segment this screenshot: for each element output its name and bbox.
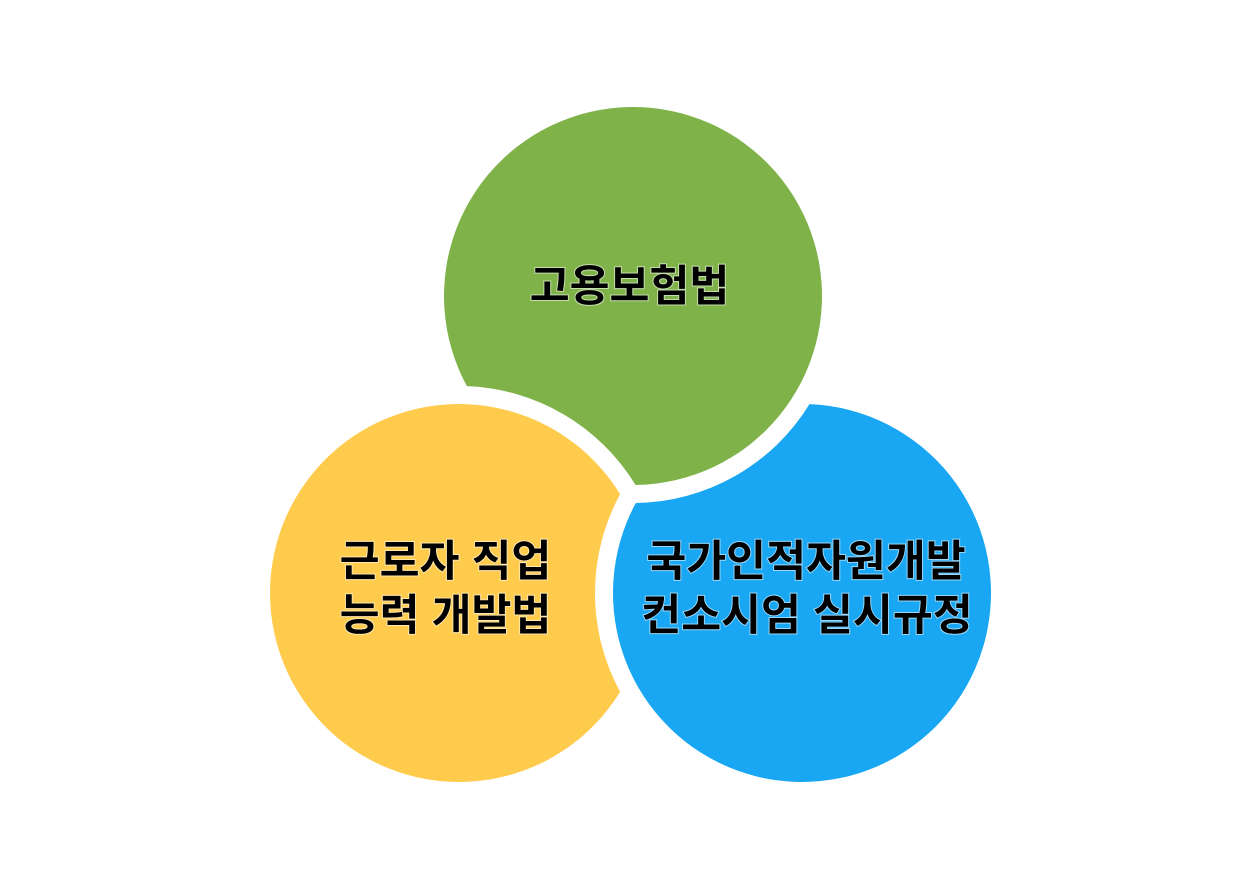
yellow circle label: 근로자 직업 — [340, 538, 551, 586]
blue circle label: 컨소시엄 실시규정 — [641, 592, 973, 640]
blue circle: 국가인적자원개발 컨소시엄 실시규정 — [613, 404, 991, 782]
yellow circle label: 능력 개발법 — [340, 592, 551, 640]
green circle shape — [444, 107, 822, 485]
yellow circle label — [340, 538, 551, 640]
blue circle label: 국가인적자원개발 — [646, 538, 966, 586]
yellow circle shape — [270, 404, 620, 782]
green circle label: 고용보험법 — [530, 263, 729, 311]
yellow circle: 근로자 직업 능력 개발법 — [270, 404, 620, 782]
blue circle label — [641, 538, 973, 640]
green circle: 고용보험법 — [444, 107, 822, 485]
blue circle shape — [613, 404, 991, 782]
